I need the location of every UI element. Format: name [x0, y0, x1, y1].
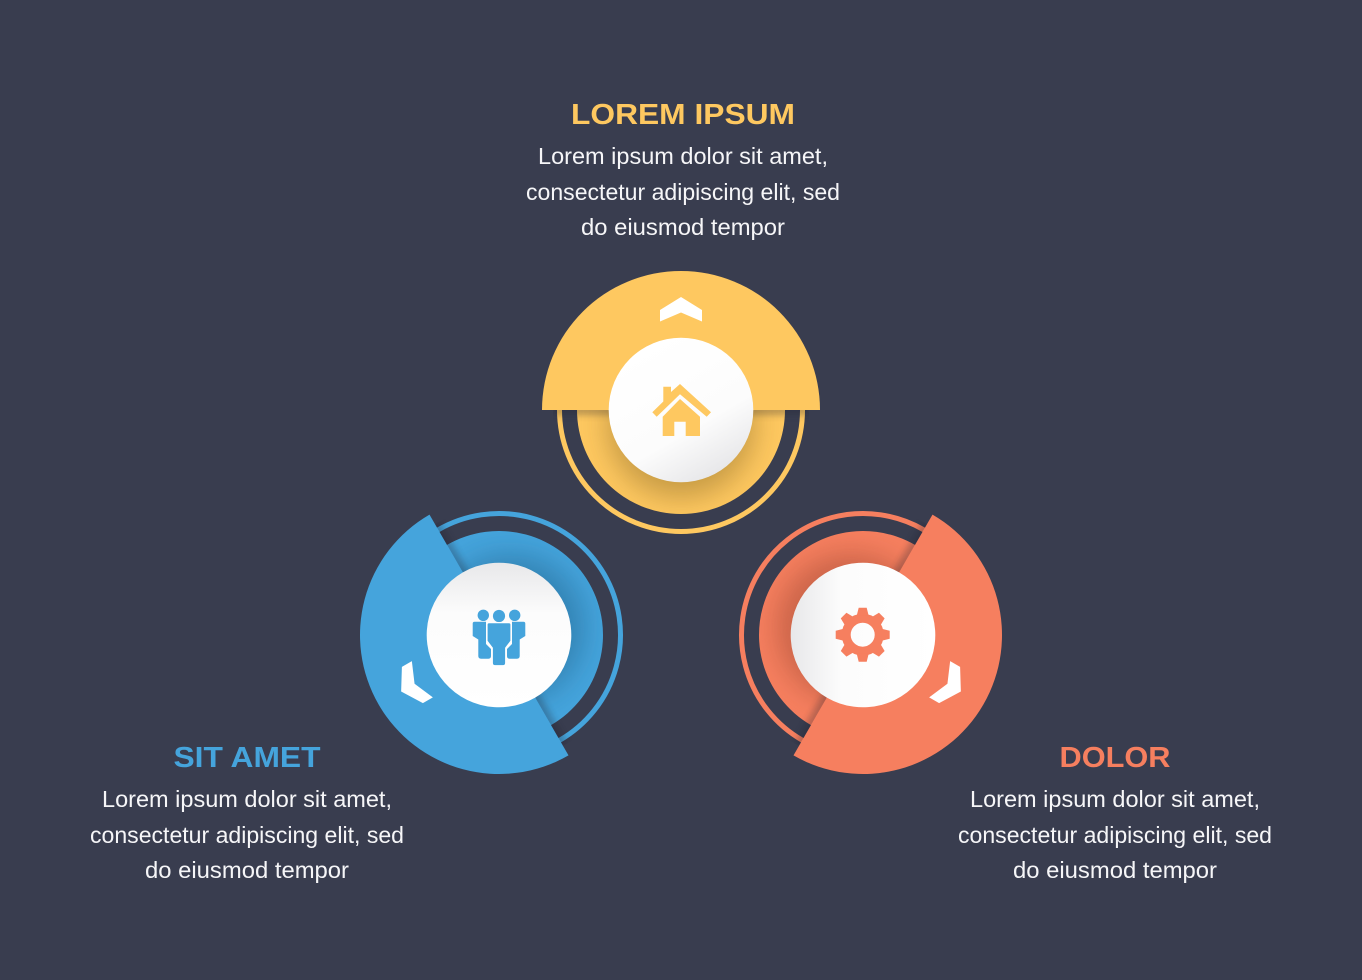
heading: sit amet: SIT AMET [174, 742, 321, 774]
panel: orange circle [738, 511, 1002, 774]
panel: sit amet text [90, 742, 404, 883]
panel: dolor text [958, 742, 1272, 883]
panel: yellow circle [542, 271, 820, 532]
text block: dolor description: Lorem ipsum dolor sit amet, [970, 786, 1260, 812]
text block: dolor description: consectetur adipiscing elit, sed [958, 822, 1272, 848]
text block: sit amet description: consectetur adipiscing elit, sed [90, 822, 404, 848]
text block: lorem ipsum description: consectetur adipiscing elit, sed [526, 179, 840, 205]
text block: dolor description: do eiusmod tempor [1013, 857, 1217, 883]
panel: lorem ipsum text [526, 99, 840, 240]
orange circle shape [738, 511, 1002, 774]
text block: sit amet description [90, 786, 404, 883]
yellow circle shape [542, 271, 820, 532]
icon: people [473, 610, 525, 666]
heading: lorem ipsum: LOREM IPSUM [571, 99, 795, 131]
icon: house [652, 384, 711, 436]
text block: lorem ipsum description: Lorem ipsum dolor sit amet, [538, 143, 828, 169]
text block: dolor description [958, 786, 1272, 883]
text block: lorem ipsum description: do eiusmod tempor [581, 214, 785, 240]
text block: sit amet description: Lorem ipsum dolor sit amet, [102, 786, 392, 812]
text block: lorem ipsum description [526, 143, 840, 240]
icon: gear [836, 608, 890, 662]
text block: sit amet description: do eiusmod tempor [145, 857, 349, 883]
panel: blue circle [360, 511, 623, 774]
blue circle shape [360, 511, 623, 774]
heading: dolor: DOLOR [1060, 742, 1171, 774]
